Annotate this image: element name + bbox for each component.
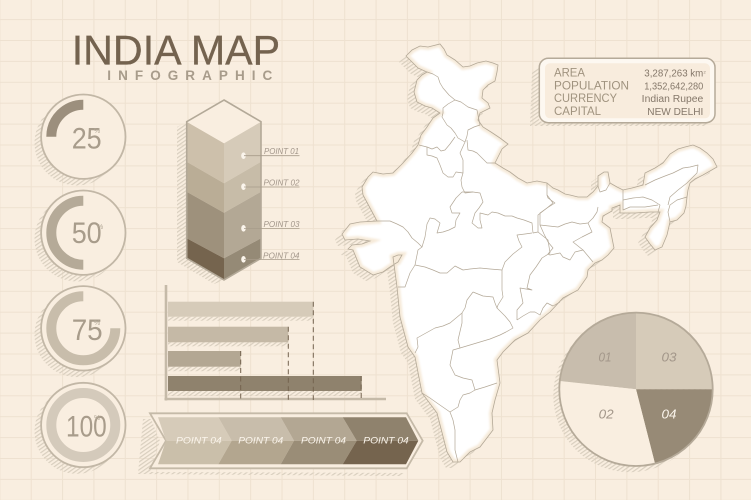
layer 2: [187, 162, 261, 213]
gauge: 25 percent: %: [94, 128, 100, 135]
segment labels: [176, 434, 409, 446]
axes: [164, 285, 386, 400]
gauge: 100 percent: 100: [66, 411, 107, 444]
info labels: CURRENCY: [554, 91, 617, 105]
column labels: [263, 147, 300, 260]
subtitle: INFOGRAPHIC: [107, 68, 273, 83]
info values: 2: [704, 70, 706, 74]
info box: [530, 58, 715, 126]
segment 3: [281, 417, 357, 464]
gauge: 100 percent: %: [94, 415, 100, 422]
column labels: POINT 04: [263, 251, 300, 260]
info labels: CAPITAL: [554, 104, 601, 118]
segment labels: POINT 04: [363, 434, 409, 446]
gauge: 25 percent: [34, 94, 126, 186]
layer 3: [187, 192, 261, 258]
map shadow: [335, 50, 710, 468]
slice 03: [636, 313, 713, 389]
column labels: POINT 02: [264, 179, 300, 188]
title: INDIA MAP: [72, 26, 280, 73]
bar chart: [164, 285, 386, 400]
pie chart: [553, 313, 713, 472]
layer 1: [187, 122, 261, 183]
gauge: 75 percent: %: [94, 320, 100, 327]
column labels: POINT 03: [264, 220, 300, 229]
map landmass: [342, 44, 717, 462]
pie labels: 04: [662, 406, 676, 422]
info labels: AREA: [554, 66, 586, 80]
slice 04: [636, 389, 713, 464]
info values: [642, 69, 706, 118]
info values: Indian Rupee: [642, 94, 704, 105]
gauge: 50 percent: %: [97, 224, 103, 231]
gauge: 50 percent: 50: [72, 217, 102, 250]
isometric column chart: [177, 100, 300, 284]
pie labels: [598, 350, 677, 422]
arrow process banner: [138, 413, 423, 476]
gauge: 50 percent: [34, 190, 126, 282]
segment labels: POINT 04: [176, 434, 222, 446]
segment 2: [218, 417, 294, 464]
column labels: POINT 01: [264, 147, 299, 156]
pie labels: 01: [598, 350, 612, 364]
info values: NEW DELHI: [647, 107, 703, 118]
slice 01: [560, 313, 636, 389]
gauge: 100 percent: [34, 383, 126, 474]
segment labels: POINT 04: [238, 434, 283, 446]
info values: 1,352,642,280: [644, 81, 704, 92]
info labels: POPULATION: [554, 78, 629, 92]
map of India: [335, 44, 717, 468]
pie labels: 03: [662, 350, 677, 364]
slice 02: [559, 381, 655, 466]
state borders: [377, 72, 698, 462]
info labels: [554, 66, 629, 118]
segment 1: [158, 417, 232, 464]
gauge: 25 percent: 25: [72, 122, 102, 155]
bars: [168, 302, 313, 317]
pie labels: 02: [599, 406, 614, 422]
segment 4: [343, 417, 418, 464]
layer 4: [187, 238, 261, 280]
gauge: 75 percent: 75: [72, 314, 103, 347]
info values: 3,287,263 km: [644, 69, 703, 80]
dashed guides: [241, 302, 361, 400]
gauge: 75 percent: [34, 286, 126, 377]
segment labels: POINT 04: [301, 434, 346, 446]
